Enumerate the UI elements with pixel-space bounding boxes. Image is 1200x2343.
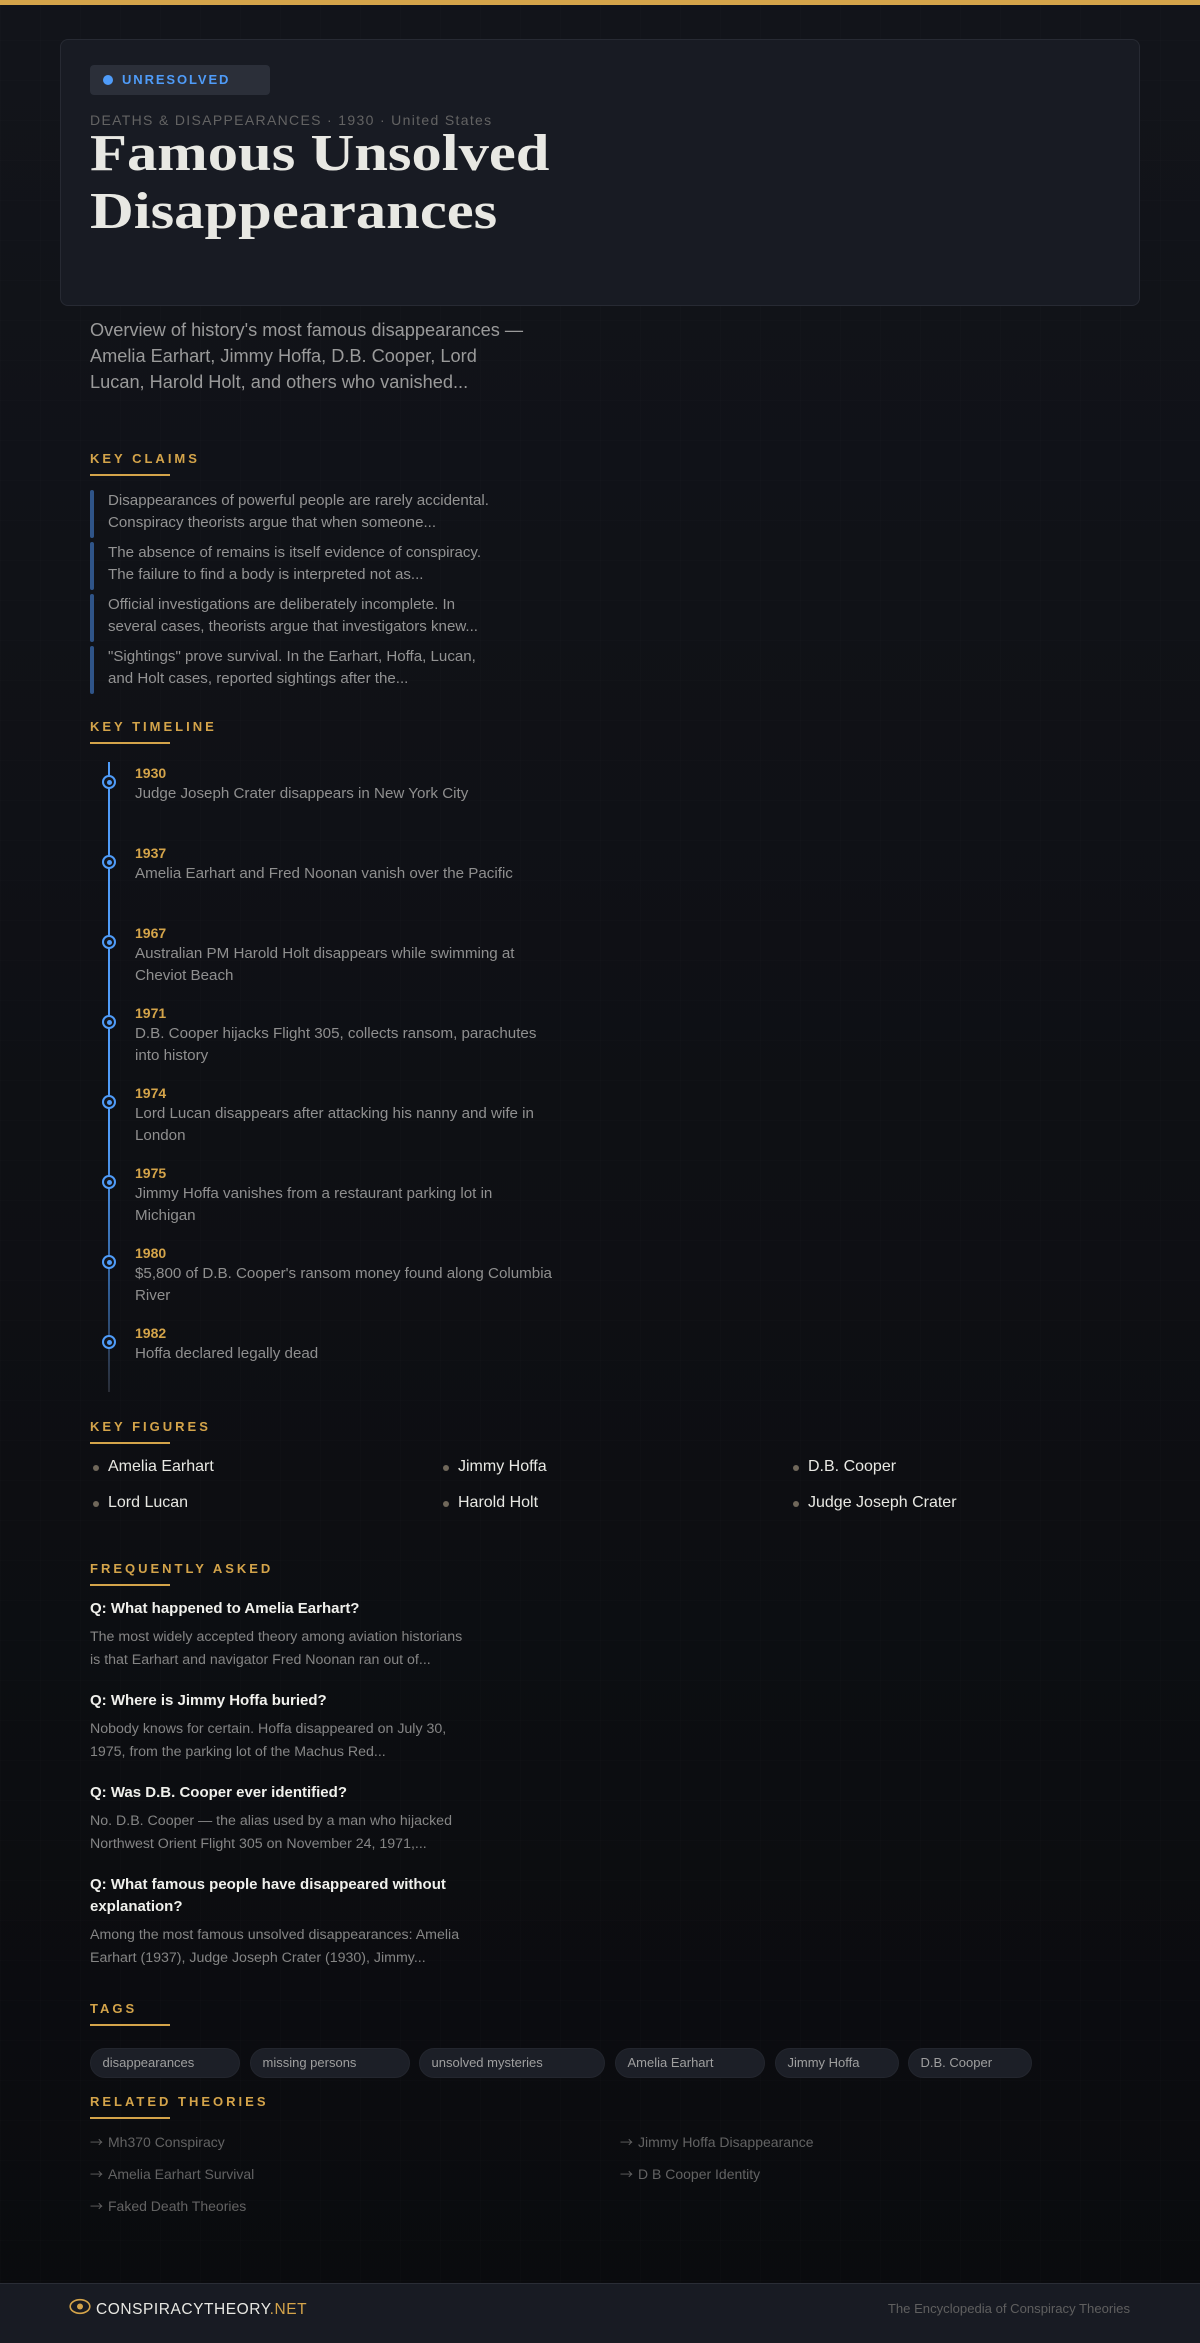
FAQ item 3: No. D.B. Cooper — the alias used by a man who hijacked	[90, 1813, 452, 1829]
claim 2: The failure to find a body is interpreted not as...	[108, 566, 423, 583]
event: 1980	[102, 1245, 552, 1304]
badge label: UNRESOLVED	[122, 72, 230, 87]
tag: missing persons	[250, 2048, 410, 2078]
claim 4: and Holt cases, reported sightings after the...	[108, 670, 408, 687]
event: 1967: 1967	[135, 925, 166, 941]
related link: Jimmy Hoffa Disappearance: →	[620, 2132, 633, 2151]
event: 1975	[102, 1165, 492, 1224]
event: 1930	[102, 765, 468, 802]
event: 1982: 1982	[135, 1325, 166, 1341]
claim 2: The absence of remains is itself evidence of conspiracy.	[108, 544, 481, 561]
icon: status dot	[103, 75, 113, 85]
panel: hero	[60, 39, 1140, 306]
title: Famous Unsolved	[90, 125, 549, 182]
FAQ item 2: Q: Where is Jimmy Hoffa buried?	[90, 1692, 327, 1709]
event: 1974: London	[135, 1127, 186, 1144]
top accent bar	[0, 0, 1200, 5]
FAQ item 4: explanation?	[90, 1898, 183, 1915]
related link: Jimmy Hoffa Disappearance: Jimmy Hoffa Disappearance	[638, 2134, 814, 2150]
claim 3: Official investigations are deliberately incomplete. In	[108, 596, 455, 613]
FAQ item 4: Among the most famous unsolved disappearances: Amelia	[90, 1927, 459, 1943]
heading: key timeline: KEY TIMELINE	[90, 719, 217, 734]
event: 1971	[102, 1005, 536, 1064]
intro text: Amelia Earhart, Jimmy Hoffa, D.B. Cooper, Lord	[90, 346, 477, 366]
tag: Jimmy Hoffa	[775, 2048, 899, 2078]
event: 1982: Hoffa declared legally dead	[135, 1345, 318, 1362]
claim 4: "Sightings" prove survival. In the Earhart, Hoffa, Lucan,	[108, 648, 476, 665]
event: 1975: 1975	[135, 1165, 166, 1181]
title	[90, 125, 549, 240]
event: 1967: Australian PM Harold Holt disappears while swimming at	[135, 945, 515, 962]
related link: Faked Death Theories: →	[90, 2196, 103, 2215]
heading: frequently asked: FREQUENTLY ASKED	[90, 1561, 273, 1576]
event: 1974	[102, 1085, 534, 1144]
FAQ item 2: Nobody knows for certain. Hoffa disappeared on July 30,	[90, 1721, 446, 1737]
claim 4	[90, 646, 476, 694]
event: 1937: Amelia Earhart and Fred Noonan vanish over the Pacific	[135, 865, 513, 882]
claim 2	[90, 542, 481, 590]
FAQ item 1: The most widely accepted theory among aviation historians	[90, 1629, 462, 1645]
FAQ item 3: Northwest Orient Flight 305 on November 24, 1971,...	[90, 1836, 427, 1852]
claim 1: Disappearances of powerful people are rarely accidental.	[108, 492, 489, 509]
panel: key figures grid	[93, 1458, 957, 1511]
logo wordmark: CONSPIRACYTHEORY.NET	[96, 2301, 307, 2318]
claim 1	[90, 490, 489, 538]
event: 1937: 1937	[135, 845, 166, 861]
FAQ item 4: Earhart (1937), Judge Joseph Crater (1930), Jimmy...	[90, 1950, 426, 1966]
FAQ item 2: 1975, from the parking lot of the Machus Red...	[90, 1744, 386, 1760]
footer tagline: The Encyclopedia of Conspiracy Theories	[888, 2301, 1130, 2316]
FAQ item 1	[90, 1600, 462, 1668]
event: 1980: River	[135, 1287, 170, 1304]
event: 1974: 1974	[135, 1085, 166, 1101]
figure: Harold Holt: Harold Holt	[458, 1494, 538, 1511]
intro text: Lucan, Harold Holt, and others who vanished...	[90, 372, 468, 392]
FAQ item 4	[90, 1876, 460, 1966]
event: 1975: Michigan	[135, 1207, 196, 1224]
tag: D.B. Cooper	[908, 2048, 1032, 2078]
figure: Judge Joseph Crater: Judge Joseph Crater	[808, 1494, 957, 1511]
event: 1971: D.B. Cooper hijacks Flight 305, collects ransom, parachutes	[135, 1025, 536, 1042]
related link: Faked Death Theories: Faked Death Theories	[108, 2198, 246, 2214]
event: 1971: into history	[135, 1047, 208, 1064]
related link: Mh370 Conspiracy: →	[90, 2132, 103, 2151]
FAQ item 3: Q: Was D.B. Cooper ever identified?	[90, 1784, 347, 1801]
event: 1980: $5,800 of D.B. Cooper's ransom money found along Columbia	[135, 1265, 552, 1282]
related link: Amelia Earhart Survival: →	[90, 2164, 103, 2183]
intro text: Overview of history's most famous disappearances —	[90, 320, 523, 340]
event: 1971: 1971	[135, 1005, 166, 1021]
event: 1982	[102, 1325, 318, 1362]
FAQ item 3	[90, 1784, 452, 1852]
tag: unsolved mysteries	[419, 2048, 605, 2078]
figure: Jimmy Hoffa: Jimmy Hoffa	[458, 1458, 547, 1475]
timeline	[102, 762, 552, 1392]
event: 1975: Jimmy Hoffa vanishes from a restaurant parking lot in	[135, 1185, 492, 1202]
event: 1980: 1980	[135, 1245, 166, 1261]
tag: unsolved mysteries: unsolved mysteries	[432, 2055, 543, 2070]
claim 3	[90, 594, 478, 642]
event: 1937	[102, 845, 513, 882]
tag: Jimmy Hoffa: Jimmy Hoffa	[788, 2055, 860, 2070]
figure: D.B. Cooper: D.B. Cooper	[808, 1458, 896, 1475]
related link: Amelia Earhart Survival: Amelia Earhart Survival	[108, 2166, 254, 2182]
FAQ item 2	[90, 1692, 446, 1760]
tag: D.B. Cooper: D.B. Cooper	[920, 2055, 992, 2070]
title: Disappearances	[90, 183, 497, 240]
category and date line: DEATHS & DISAPPEARANCES · 1930 · United States	[90, 112, 492, 128]
figure: Lord Lucan: Lord Lucan	[108, 1494, 188, 1511]
intro text	[90, 320, 524, 392]
tag: disappearances: disappearances	[102, 2055, 194, 2070]
event: 1930: Judge Joseph Crater disappears in New York City	[135, 785, 468, 802]
event: 1967	[102, 925, 515, 984]
related link: D B Cooper Identity: D B Cooper Identity	[638, 2166, 760, 2182]
FAQ item 4: Q: What famous people have disappeared without	[90, 1876, 446, 1893]
event: 1974: Lord Lucan disappears after attacking his nanny and wife in	[135, 1105, 534, 1122]
related link: Mh370 Conspiracy: Mh370 Conspiracy	[108, 2134, 225, 2150]
tag: Amelia Earhart	[615, 2048, 765, 2078]
timeline axis	[108, 762, 110, 1392]
status badge: unresolved	[90, 65, 270, 95]
tag: Amelia Earhart: Amelia Earhart	[628, 2055, 713, 2070]
heading: key figures: KEY FIGURES	[90, 1419, 211, 1434]
tag: missing persons: missing persons	[262, 2055, 356, 2070]
FAQ item 1: Q: What happened to Amelia Earhart?	[90, 1600, 359, 1617]
heading: related theories: RELATED THEORIES	[90, 2094, 268, 2109]
event: 1967: Cheviot Beach	[135, 967, 233, 984]
tag: disappearances	[90, 2048, 240, 2078]
panel: key claims list	[90, 490, 489, 694]
footer	[0, 2283, 1200, 2343]
claim 1: Conspiracy theorists argue that when someone...	[108, 514, 436, 531]
FAQ item 1: is that Earhart and navigator Fred Noonan ran out of...	[90, 1652, 431, 1668]
heading: key claims: KEY CLAIMS	[90, 451, 200, 466]
figure: Amelia Earhart: Amelia Earhart	[108, 1458, 214, 1475]
event: 1930: 1930	[135, 765, 166, 781]
heading: tags: TAGS	[90, 2001, 137, 2016]
related link: D B Cooper Identity: →	[620, 2164, 633, 2183]
claim 3: several cases, theorists argue that investigators knew...	[108, 618, 478, 635]
icon: eye logo	[69, 2298, 91, 2314]
